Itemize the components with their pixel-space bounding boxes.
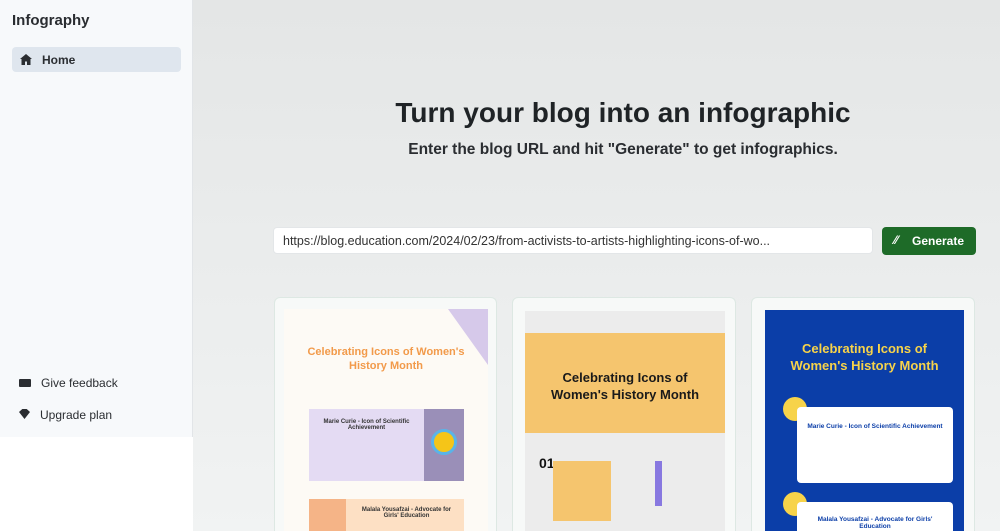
generate button (882, 227, 976, 255)
card1 item 2 (309, 499, 464, 531)
card1 item 1 (309, 409, 464, 481)
subtitle: Enter the blog URL and hit "Generate" to get infographics. (408, 141, 838, 158)
card 2 (512, 297, 736, 531)
nav: give feedback: Give feedback (41, 376, 118, 390)
card 2: 01 (539, 455, 555, 471)
card 3: Marie Curie - Icon of Scientific Achievement (807, 423, 943, 430)
sidebar (0, 0, 193, 437)
card 1 (274, 297, 497, 531)
card 3: Malala Yousafzai - Advocate for Girls' Education (818, 516, 932, 530)
card1 item 1: Marie Curie - Icon of Scientific Achievement (323, 419, 410, 431)
url input: https://blog.education.com/2024/02/23/from-activists-to-artists-highlighting-icons-of-wo... (283, 234, 770, 248)
card3 heading: Celebrating Icons of Women's History Month (790, 341, 939, 373)
card1 item 2: Malala Yousafzai - Advocate for Girls' Education (362, 507, 451, 519)
url input (273, 227, 873, 254)
title: Turn your blog into an infographic (395, 97, 851, 128)
card2 heading: Celebrating Icons of Women's History Month (551, 370, 699, 402)
card 3 (751, 297, 975, 531)
app name: Infography (12, 12, 90, 29)
nav: home: Home (42, 53, 75, 67)
nav: upgrade plan: Upgrade plan (40, 408, 112, 422)
nav: home (12, 47, 181, 72)
generate button: ⁄⁄ (894, 233, 898, 247)
generate button: Generate (912, 234, 964, 248)
card1 heading: Celebrating Icons of Women's History Month (307, 346, 465, 372)
